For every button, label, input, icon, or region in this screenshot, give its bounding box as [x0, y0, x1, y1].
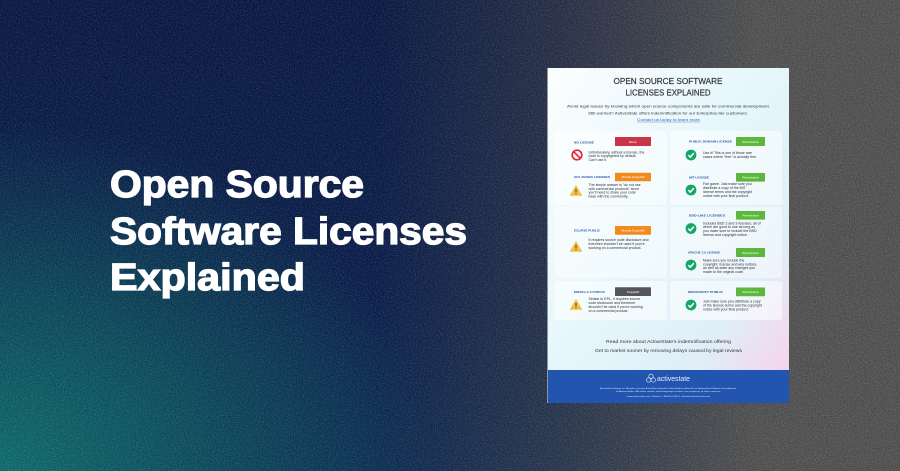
- panel: public domain and MIT: [670, 131, 782, 205]
- public domain row: Use it! This is one of those rare: [703, 151, 752, 155]
- public domain row: cases where "free" is actually free.: [703, 155, 757, 159]
- MIT row: distribute a copy of the MIT: [703, 186, 747, 190]
- hero heading: [110, 164, 467, 299]
- Apache row: copyright, license and any notices,: [703, 262, 757, 266]
- Apache row: made to the original code.: [703, 270, 744, 274]
- panel: microsoft public: MICROSOFT PUBLIC: [688, 290, 724, 294]
- panel: eclipse public: Mostly Copyleft: [621, 228, 645, 232]
- no license row: Can't use it.: [588, 158, 607, 162]
- panel: microsoft public: Permissive: [742, 290, 759, 294]
- public domain row: [686, 137, 765, 160]
- panel: mozilla public: MOZILLA 2 PUBLIC: [574, 290, 606, 294]
- infographic sheet: [548, 68, 789, 403]
- BSD row: BSD-LIKE LICENSES: [689, 214, 725, 218]
- panel: microsoft public: notice with your final product.: [703, 308, 749, 312]
- intro text: Still worried? ActiveState offers indemnification for our Enterprise-tier customers.: [588, 110, 748, 115]
- no license row: code is copyrighted by default.: [588, 154, 636, 158]
- panel: no license and GPL: [555, 131, 667, 205]
- MIT row: notice with your final product.: [703, 194, 749, 198]
- GPL row: Mostly Copyleft: [621, 175, 645, 179]
- Apache row: [686, 248, 765, 274]
- no license row: [572, 137, 651, 162]
- panel: mozilla public: Copyleft: [627, 290, 639, 294]
- hero heading: Software Licenses: [110, 211, 467, 253]
- MIT row: [686, 173, 765, 198]
- no license row: None: [629, 140, 637, 144]
- BSD row: you make sure to include the BSD: [703, 229, 757, 233]
- panel: mozilla public: code disclosure and therefore: [588, 301, 635, 305]
- BSD row: Includes BSD 2 and 3 licenses, all of: [703, 221, 761, 225]
- sheet title: [614, 77, 722, 98]
- Apache row: APACHE 2.0 LICENSE: [688, 251, 720, 255]
- footer band: [548, 370, 789, 403]
- MIT row: MIT LICENSE: [689, 176, 709, 180]
- panel: mozilla public: on a commercial product.: [588, 309, 628, 313]
- panel: mozilla public: [555, 281, 667, 320]
- Apache row: as well as state any changes you: [703, 266, 755, 270]
- panel: eclipse public: working on a commercial product.: [588, 246, 642, 250]
- no license row: Unfortunately, without a license, the: [588, 150, 644, 154]
- panel: eclipse public: It requires source code disclosure and: [588, 238, 648, 242]
- legal text: www.activestate.com | Toll-free: 1.866.510.2914 | solutions@activestate.com: [627, 395, 710, 398]
- MIT row: Fair game. Just make sure you: [703, 182, 752, 186]
- GPL row: The simple answer is "do not use: [588, 183, 641, 187]
- BSD row: license and copyright notice.: [703, 233, 748, 237]
- BSD row: which are good to use as long as: [703, 225, 755, 229]
- legal text: ActiveState Software Inc. All rights reserved. ActiveState, ActivePerl, ActivePython, ActiveTcl, and ActiveState Platform are trademarks: [600, 387, 737, 390]
- MIT row: license terms and the copyright: [703, 190, 752, 194]
- hero heading: Open Source: [110, 164, 364, 206]
- MIT row: Permissive: [742, 176, 759, 180]
- panel: eclipse public: [555, 207, 667, 278]
- GPL row: [570, 173, 651, 198]
- panel: BSD and Apache: [670, 207, 782, 278]
- legal text: of ActiveState. All other marks and language names are property of their owners.: [616, 390, 722, 393]
- BSD row: [686, 211, 765, 237]
- panel: eclipse public: ECLIPSE PUBLIC: [574, 229, 601, 233]
- intro text: Contact us today to learn more: [637, 117, 700, 122]
- Apache row: Permissive: [742, 251, 759, 255]
- GPL row: with commercial products" since: [588, 187, 639, 191]
- public domain row: PUBLIC DOMAIN LICENSE: [689, 140, 732, 144]
- BSD row: Permissive: [742, 214, 759, 218]
- brand name: activestate: [657, 376, 690, 383]
- panel: mozilla public: shouldn't be used if you're working: [588, 305, 643, 309]
- no license row: NO LICENSE: [574, 140, 594, 144]
- closing text: Read more about ActiveState's indemnification offering: [606, 339, 732, 344]
- legal text: [600, 387, 737, 398]
- panel: microsoft public: of the license terms and the copyright: [703, 304, 762, 308]
- GPL row: base with the community.: [588, 194, 628, 198]
- panel: microsoft public: [670, 281, 782, 320]
- closing text: [595, 339, 743, 353]
- sheet title: OPEN SOURCE SOFTWARE: [614, 77, 722, 86]
- intro text: [567, 104, 770, 122]
- panel: eclipse public: therefore shouldn't be used if you're: [588, 242, 645, 246]
- Apache row: Make sure you include the: [703, 258, 744, 262]
- closing text: Get to market sooner by removing delays caused by legal reviews: [595, 348, 743, 353]
- panel: mozilla public: Similar to EPL, it requires source: [588, 297, 640, 301]
- icon: activestate logo: [646, 374, 656, 382]
- sheet title: LICENSES EXPLAINED: [626, 88, 711, 98]
- GPL row: GPL BASED LICENSES: [574, 175, 610, 179]
- hero heading: Explained: [110, 257, 305, 299]
- panel: microsoft public: Just make sure you distribute a copy: [703, 300, 761, 304]
- public domain row: Permissive: [742, 140, 759, 144]
- intro text: Avoid legal issues by knowing which open source components are safe for commercial development.: [567, 104, 770, 108]
- GPL row: you'll need to share your code: [588, 191, 636, 195]
